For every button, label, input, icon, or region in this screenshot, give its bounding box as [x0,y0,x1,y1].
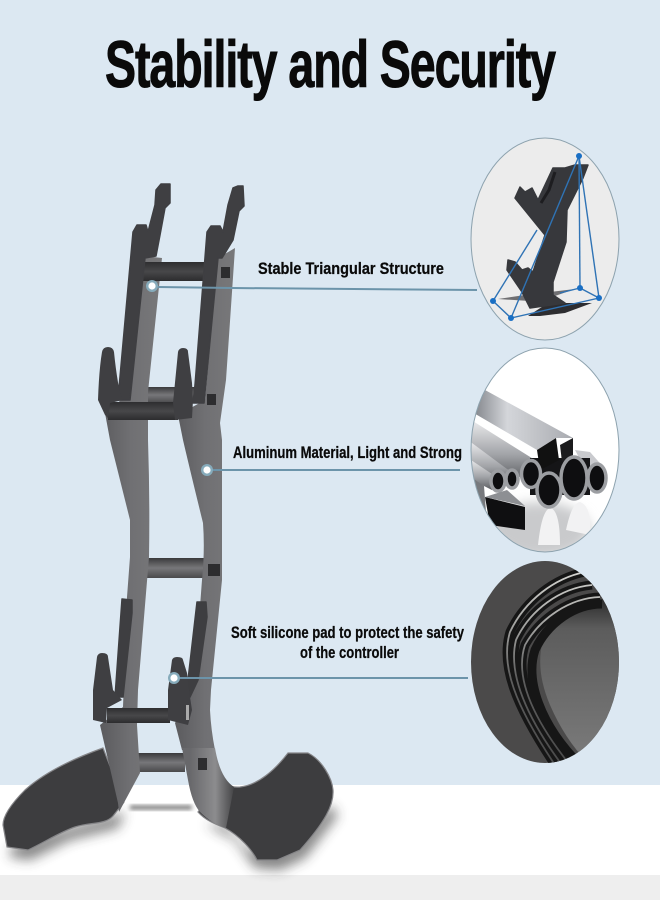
product: controller stand [3,184,338,870]
square tube ends [537,438,559,458]
round tube ends [491,457,606,507]
lower dark back arms [115,599,207,697]
square tube top [472,390,573,450]
left foot [3,748,124,850]
back bars [113,387,208,772]
circle: silicone pad [471,561,625,765]
label: soft silicone pad [231,624,465,662]
upper left dark plate [119,184,170,400]
left upright grey plate [100,256,162,812]
label: aluminum material: Aluminum Material, Light and Strong [233,444,462,462]
small stand silhouette [507,165,588,308]
structure lines [493,156,599,318]
floor reflection [490,502,590,558]
right foot bend [182,748,234,828]
third tier front hooks and bar [93,653,192,725]
right upright grey plate [175,248,235,750]
front square tube [485,497,525,530]
pad surface [540,599,619,752]
label: stable triangular structure: Stable Triangular Structure [258,259,444,278]
label: soft silicone pad: Soft silicone pad to protect the safety [231,624,465,642]
circle: triangular structure diagram [471,138,619,340]
label: soft silicone pad: of the controller [300,644,399,662]
callout lines [158,287,477,678]
second tier front hooks and bar [98,347,193,420]
structure nodes [490,153,602,321]
upper right dark plate [193,186,244,403]
front base [528,303,592,316]
foot shadows [10,805,338,870]
callout dots [146,280,213,684]
back base [498,289,575,301]
circle: aluminum tubes [468,348,619,558]
bolt heads [198,267,230,770]
cord highlights [507,572,600,765]
long round tubes [472,422,532,477]
silicone cords [507,572,602,765]
right foot [198,753,333,860]
upper bar [143,262,207,281]
